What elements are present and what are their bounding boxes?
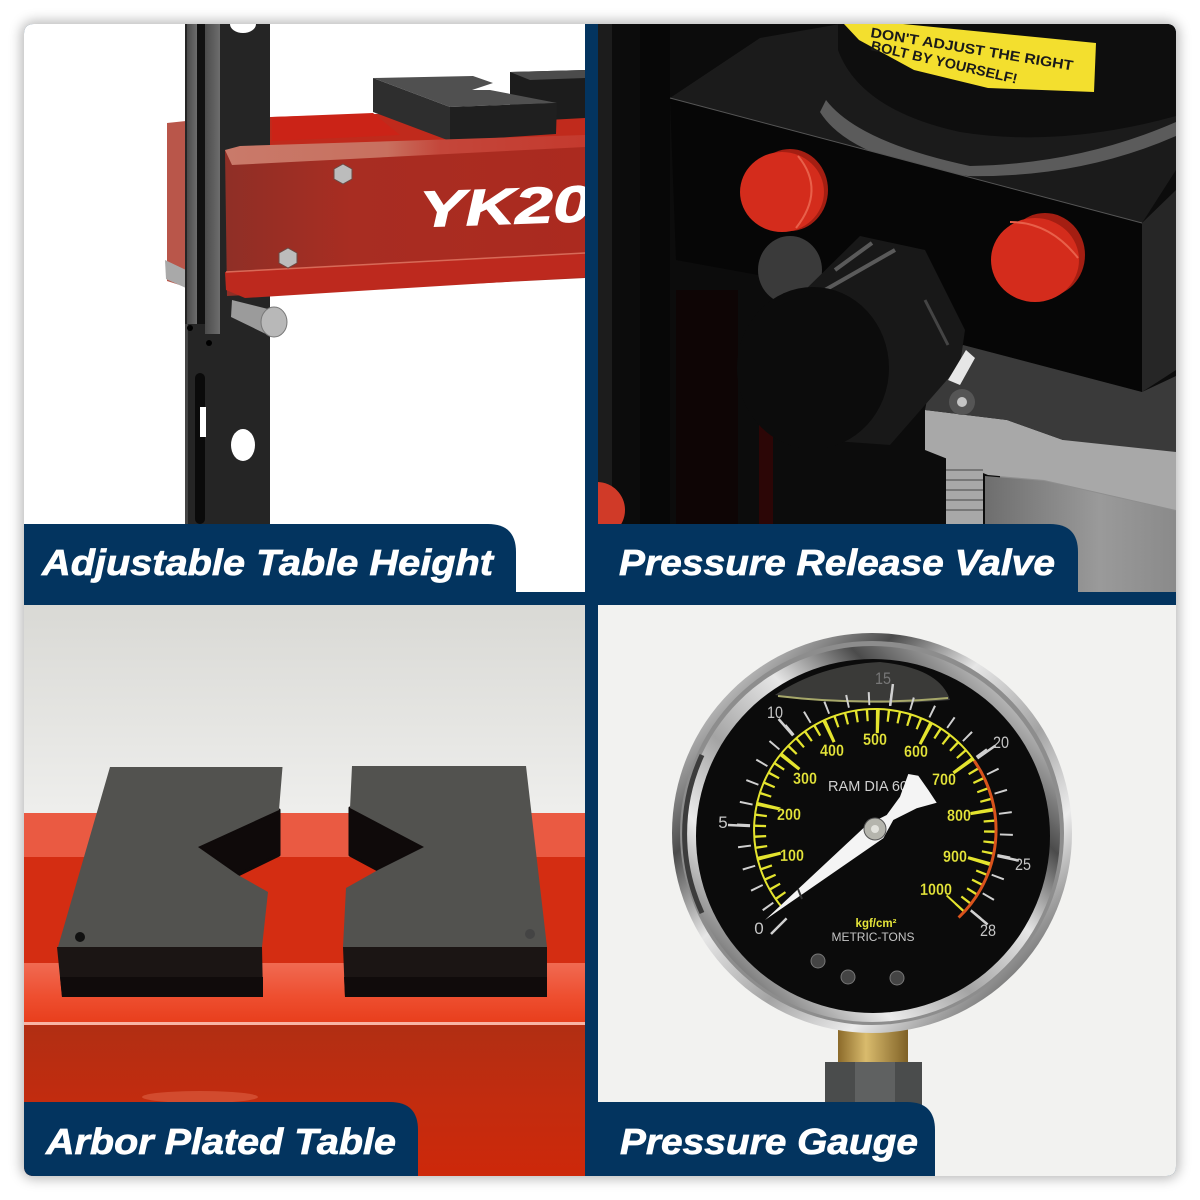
- yellow scale numbers: 100: [780, 846, 804, 865]
- steel column: [185, 15, 270, 524]
- tonne scale numbers: 28: [980, 921, 996, 940]
- label: pressure release valve: [585, 524, 1078, 605]
- weld bead: [820, 100, 1176, 176]
- yellow scale numbers: 600: [904, 742, 928, 761]
- hydraulic reservoir: [838, 24, 1176, 137]
- chrome bezel: [672, 633, 1072, 1033]
- rear beam flange: [270, 114, 585, 145]
- yellow scale numbers: [777, 730, 971, 899]
- press column: [598, 24, 773, 524]
- label: adjustable table height: [24, 524, 516, 605]
- gray lower background: [1000, 476, 1176, 511]
- locking pin: [231, 300, 287, 337]
- tonne scale numbers: 10: [767, 703, 783, 722]
- needle: [765, 774, 937, 920]
- yellow scale numbers: 700: [932, 770, 956, 789]
- left arbor plate: [57, 767, 282, 997]
- label: pressure release valve: Pressure Release Valve: [619, 542, 1055, 583]
- release valve knob: [758, 236, 975, 445]
- scale name: METRIC-TONS: [832, 930, 914, 944]
- divider restore: [1078, 592, 1176, 605]
- label: adjustable table height: Adjustable Table Height: [41, 542, 495, 583]
- tonne scale numbers: 25: [1015, 855, 1031, 874]
- gauge: [672, 633, 1072, 1033]
- left red plug: [740, 149, 828, 232]
- yellow scale numbers: 900: [943, 847, 967, 866]
- yellow scale numbers: 400: [820, 741, 844, 760]
- tonne scale numbers: 5: [718, 813, 728, 832]
- warning label: BOLT BY YOURSELF!: [869, 37, 1019, 87]
- bolts: [279, 164, 352, 268]
- panel: pressure gauge: [598, 605, 1176, 1176]
- tonne scale numbers: [718, 669, 1031, 940]
- yellow scale numbers: 500: [863, 730, 887, 749]
- outer tonne scale: [728, 684, 1019, 934]
- dial screws: [811, 954, 904, 985]
- label: pressure gauge: Pressure Gauge: [620, 1121, 918, 1162]
- panel: pressure release valve: [569, 24, 1176, 592]
- dial face: [696, 659, 1050, 1013]
- left locking pin: [165, 260, 186, 288]
- label: arbor plated table: [24, 1102, 418, 1176]
- glass reflection: [775, 662, 950, 703]
- red table beam: [225, 135, 585, 298]
- tonne scale numbers: 15: [875, 669, 891, 688]
- panel: arbor plated table: [24, 605, 585, 1176]
- yellow scale numbers: 200: [777, 805, 801, 824]
- label: pressure gauge: [585, 1102, 935, 1176]
- arbor plate top view: [373, 70, 585, 141]
- brass fitting and hex nut: [825, 1030, 922, 1105]
- panel: adjustable table height: [24, 15, 592, 592]
- pump block side: [1142, 190, 1176, 392]
- right arbor plate: [343, 766, 547, 997]
- warning label: DON'T ADJUST THE RIGHT: [870, 24, 1075, 74]
- pump block top: [670, 24, 1176, 223]
- tonne scale numbers: 0: [754, 919, 764, 938]
- red table: [24, 813, 585, 1176]
- aluminium bracket: [925, 345, 1176, 510]
- yellow scale numbers: 300: [793, 769, 817, 788]
- unit text: kgf/cm²: [856, 918, 897, 930]
- label: arbor plated table: Arbor Plated Table: [45, 1121, 396, 1162]
- rear red beam end: [167, 121, 186, 287]
- logo text: YK20: [418, 175, 592, 238]
- tonne scale numbers: 20: [993, 733, 1009, 752]
- yellow pressure scale: [750, 705, 999, 920]
- dial text: RAM DIA 60: [828, 778, 908, 795]
- red danger arc: [959, 761, 996, 918]
- yellow scale numbers: 800: [947, 806, 971, 825]
- yellow scale numbers: 1000: [920, 880, 952, 899]
- pump body: [985, 476, 1118, 592]
- right red plug: [991, 213, 1085, 302]
- threaded bolt: [946, 458, 983, 524]
- pump block front: [871, 152, 956, 174]
- warning label: [844, 24, 1096, 92]
